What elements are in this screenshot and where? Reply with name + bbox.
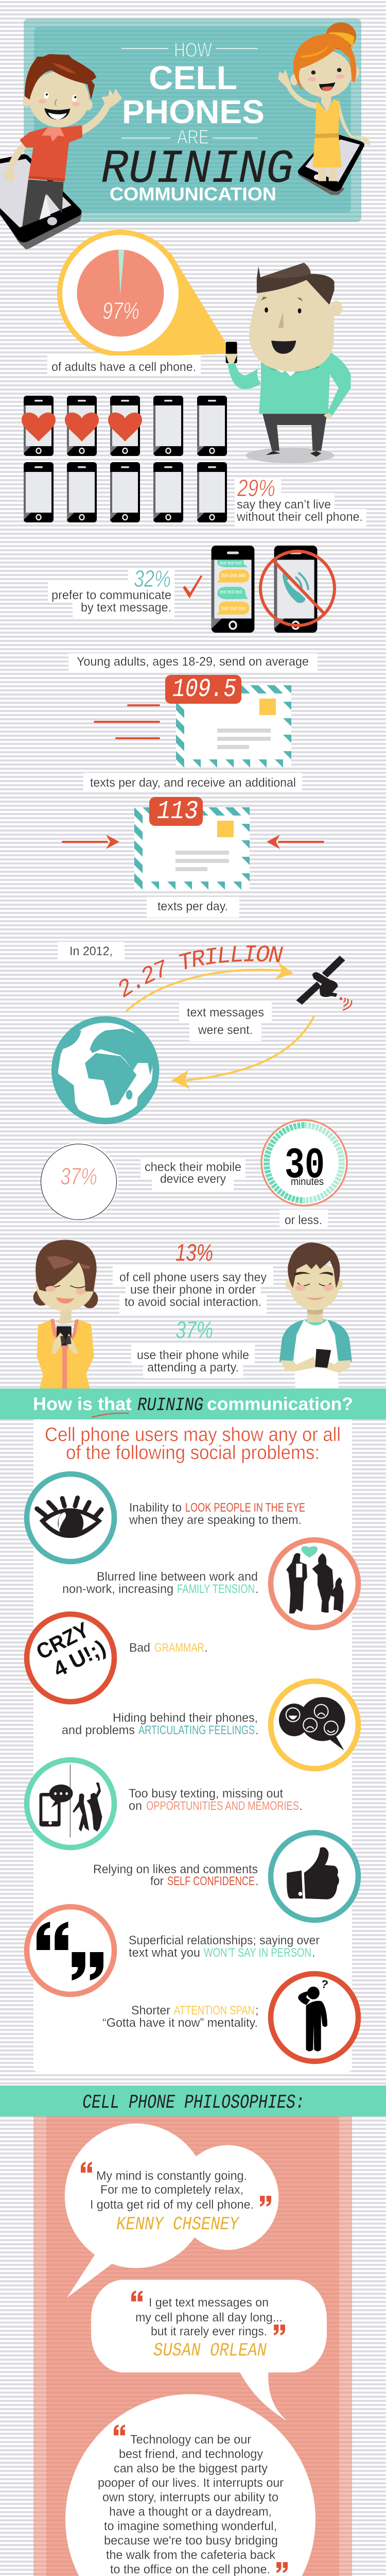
icon: family [271,1540,358,1628]
text block: opportunities and memories: on [129,1799,142,1813]
pictogram: phones with hearts [22,396,227,522]
text block: 29 percent: without their cell phone. [236,510,363,524]
callout: 37 percent circle [41,1142,118,1220]
icon: envelope 109.5 [165,675,291,768]
banner: how is that ruining communication: RUINING [137,1395,203,1416]
speech bubble: Stephen Spielberg: because we're too busy bridging [104,2534,278,2548]
text block: 32 percent: prefer to communicate [51,588,171,602]
text block: articulating feelings [62,1711,259,1737]
text block: texts per day [147,897,239,918]
speech bubble: Stephen Spielberg: pooper of our lives. It interrupts our [98,2476,284,2490]
panel: header: PHONES [122,93,265,130]
text block: young adults: Young adults, ages 18-29, send on average [77,655,309,669]
speech bubble: Stephen Spielberg: to imagine something wonderful, [104,2519,277,2533]
icon: phone with text bubbles: text text text [220,561,242,566]
illustration: man with phone [225,263,351,463]
speech bubble: Stephen Spielberg: best friend, and technology [119,2447,263,2461]
text block: 13 percent [113,1239,273,1315]
speech bubble: Stephen Spielberg: own story, interrupts our ability to [102,2490,278,2504]
banner: how is that ruining communication: communication? [207,1394,353,1414]
icon: phone with text bubbles: text text text [220,589,242,595]
text block: 29 percent [235,474,366,528]
text block: opportunities and memories: Too busy texting, missing out [129,1787,283,1801]
speech bubble: Kenny Chesney: My mind is constantly going. [96,2169,247,2183]
text block: or less [279,1210,328,1229]
text block: 32 percent: 32% [134,565,171,592]
banner: how is that ruining communication [0,1388,386,1419]
speech bubble: Stephen Spielberg: have a thought or a daydream, [109,2505,272,2519]
arrow: left [267,835,324,849]
panel: header: HOW [174,39,212,61]
text block: text messages were sent: were sent. [198,1023,253,1037]
text block: bad grammar: GRAMMAR [154,1641,204,1655]
text block: or less: or less. [285,1213,322,1227]
text block: attention span: ; [255,2004,259,2018]
speech bubble: Susan Orlean: but it rarely ever rings. [151,2325,267,2338]
speech bubble: Susan Orlean: my cell phone all day long... [135,2311,283,2325]
text block: family tension: non-work, increasing [62,1582,173,1596]
text block: attention span [102,2004,259,2030]
text block: eye contact: Inability to [129,1501,182,1515]
speech bubble: Stephen Spielberg: the walk from the cafeteria back [106,2548,276,2562]
text block: self confidence: Relying on likes and comments [93,1862,258,1876]
curved heading: 2.27 trillion: 2.27 TRILLION [119,945,283,997]
banner: cell phone philosophies [0,2086,386,2116]
text block: check mobile device [141,1157,245,1192]
text block: won't say in person: . [312,1946,315,1960]
text block: check mobile device: device every [160,1172,226,1186]
icon: globe [51,1016,159,1124]
text block: opportunities and memories [129,1787,303,1813]
text block: attention span: Shorter [131,2004,170,2018]
illustration: girl waving with tablet [278,22,371,195]
illustration: girl using phone [33,1240,98,1388]
text block: 13 percent: to avoid social interaction. [125,1295,261,1309]
text block: articulating feelings: ARTICULATING FEELINGS [138,1723,255,1737]
icon: phone with text bubbles: blah blah blah [221,573,246,579]
speech bubble: Susan Orlean: I get text messages on [149,2296,269,2310]
text block: self confidence: SELF CONFIDENCE [167,1874,255,1888]
panel: header: RUINING [101,142,293,196]
text block: eye contact: LOOK PEOPLE IN THE EYE [185,1501,305,1515]
icon: phone with text bubbles [212,546,254,633]
text block: texts per day: texts per day. [157,900,228,913]
icon: phone with text bubbles: blah blah blah [221,606,246,612]
panel: header: ARE [177,126,209,148]
icon: confused person: ? [320,1977,329,1991]
icon: thumbs up [271,1833,358,1920]
illustration: boy waving with tablet [0,54,122,249]
icon: phone call crossed out [260,546,335,633]
text block: 37 percent party: use their phone while [137,1348,249,1362]
text block: bad grammar: Bad [129,1641,150,1655]
text block: eye contact [129,1501,305,1527]
icon: bad grammar text [27,1614,114,1702]
text block: 32 percent [48,565,174,618]
text block: family tension [62,1570,259,1596]
text block: family tension: Blurred line between work and [97,1570,258,1584]
text block: 29 percent: 29% [237,474,275,501]
arrow: to satellite [127,962,293,1011]
text block: 37 percent party [131,1316,255,1378]
icon: quotation marks [27,1907,114,1994]
text block: bad grammar [129,1641,208,1655]
chart: 97 percent pie in yellow pin [57,230,225,357]
text block: won't say in person [129,1934,320,1960]
text block: 37 percent party: attending a party. [147,1361,239,1375]
text block: attention span: ATTENTION SPAN [174,2004,255,2018]
text block: articulating feelings: Hiding behind their phones, [113,1711,258,1725]
text block: won't say in person: text what you [129,1946,200,1960]
text block: in 2012 [58,942,125,961]
speech bubble: Susan Orlean [91,2280,327,2421]
icon: satellite [296,956,352,1010]
text block: articulating feelings: . [255,1723,259,1737]
icon: emoji speech bubbles [271,1681,358,1769]
text block: adults have a cell phone [47,355,201,375]
speech bubble: Kenny Chesney: KENNY CHSENEY [116,2214,240,2235]
speech bubble: Stephen Spielberg [53,2394,315,2576]
text block: check mobile device: check their mobile [145,1160,241,1174]
callout: 37 percent circle: 37% [60,1163,97,1190]
text block: attention span: “Gotta have it now” mentality. [102,2016,258,2030]
text block: receive an additional: texts per day, and receive an additional [90,776,296,790]
text block: 37 percent party: 37% [176,1316,213,1343]
text block: self confidence: . [255,1874,259,1888]
text block: articulating feelings: and problems [62,1723,135,1737]
panel: header: COMMUNICATION [110,183,276,205]
text block: eye contact: when they are speaking to them. [129,1513,302,1527]
text block: text messages were sent: text messages [187,1006,264,1020]
icon: check mark [183,575,202,599]
heading: social problems: of the following social problems: [66,1442,320,1464]
panel: philosophies [33,2116,352,2576]
text block: 13 percent: of cell phone users say they [119,1270,267,1284]
icon: confused person [271,1974,358,2061]
speech bubble: Susan Orlean: SUSAN ORLEAN [153,2340,267,2361]
text block: adults have a cell phone: of adults have a cell phone. [51,360,196,374]
icon: envelope 113: 113 [157,797,198,826]
text block: won't say in person: Superficial relationships; saying over [129,1934,320,1947]
text block: family tension: FAMILY TENSION [177,1582,255,1596]
speed lines [94,704,160,739]
speech bubble: Stephen Spielberg: Technology can be our [130,2433,251,2447]
icon: 30 minute timer [261,1120,347,1206]
banner: cell phone philosophies: CELL PHONE PHILOSOPHIES: [82,2092,305,2114]
text block: 29 percent: say they can’t live [237,498,331,512]
text block: text messages were sent [179,1002,272,1041]
icon: texting versus memories [27,1760,114,1848]
icon: bad grammar text: 4 U!;) [49,1635,110,1682]
speech bubble: Kenny Chesney: For me to completely relax, [100,2183,243,2197]
arrow: to earth [171,1016,314,1089]
heading: social problems [45,1424,341,1464]
icon: bad grammar text: CRZY [32,1617,93,1664]
text block: family tension: . [255,1582,259,1596]
chart: 97 percent pie in yellow pin: 97% [102,297,139,324]
heading: social problems: Cell phone users may show any or all [45,1424,341,1446]
icon: envelope 109.5: 109.5 [172,675,236,704]
panel: header [24,19,361,222]
icon: envelope 113 [134,797,250,890]
banner: how is that ruining communication: How is that [33,1394,132,1414]
icon: 30 minute timer: 30 [285,1142,325,1191]
text block: self confidence [93,1862,259,1888]
text block: self confidence: for [150,1874,164,1888]
icon: 30 minute timer: minutes [291,1176,324,1188]
text block: won't say in person: WON’T SAY IN PERSON [204,1946,311,1960]
arrow: right [62,835,119,849]
text block: opportunities and memories: OPPORTUNITIES AND MEMORIES [146,1799,299,1813]
panel: header: CELL [149,59,237,96]
text block: opportunities and memories: . [299,1799,303,1813]
illustration: boy using phone [279,1243,352,1388]
text block: 13 percent: 13% [176,1239,213,1266]
speech bubble: Kenny Chesney: I gotta get rid of my cell phone. [90,2198,254,2212]
icon: eye [27,1474,114,1562]
text block: 32 percent: by text message. [81,601,171,615]
speech bubble: Kenny Chesney [65,2124,278,2298]
text block: 13 percent: use their phone in order [130,1283,256,1297]
text block: bad grammar: . [204,1641,208,1655]
panel: social problems [33,1419,352,2072]
speech bubble: Stephen Spielberg: can also be the biggest party [114,2462,268,2476]
text block: in 2012: In 2012, [69,944,113,958]
